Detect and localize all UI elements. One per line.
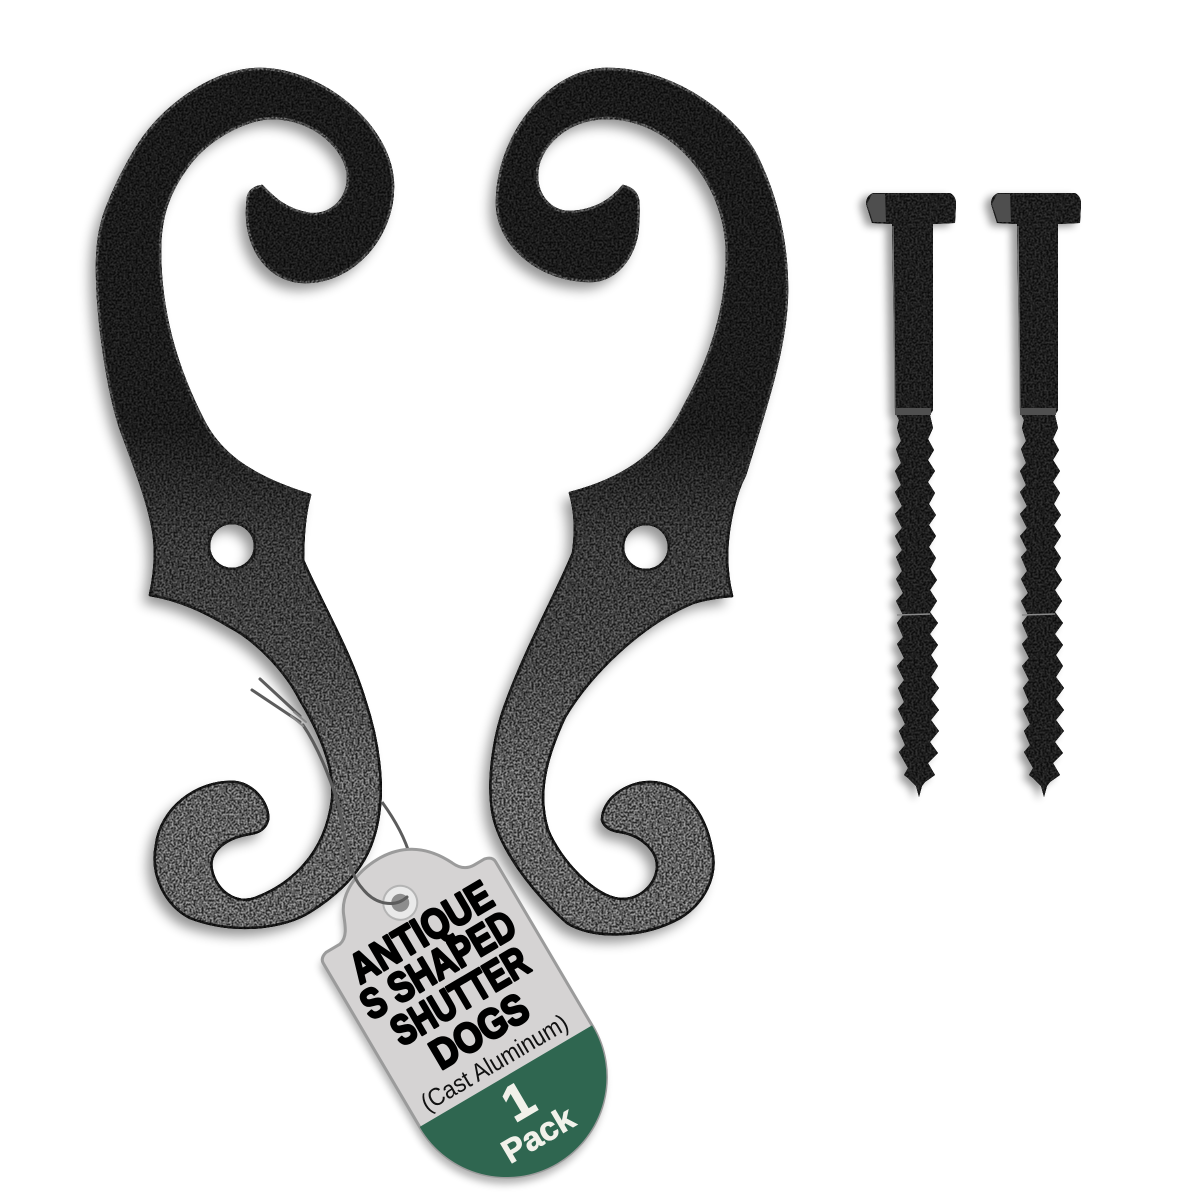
tag title: DOGS: [422, 984, 537, 1078]
lag screw: right: [985, 193, 1081, 800]
shutter dog: right: [483, 69, 787, 942]
tag green footer: [420, 1025, 643, 1200]
shutter dog: left: [90, 69, 393, 936]
tag title: ANTIQUE: [341, 872, 501, 992]
pack count: 1: [492, 1070, 545, 1133]
wire: tag tie in front: [252, 679, 407, 903]
wire: tag tie behind tag: [382, 802, 410, 856]
pack label: Pack: [495, 1098, 581, 1170]
lag screw: left: [860, 193, 956, 800]
tag title: SHUTTER: [382, 937, 537, 1055]
tag subtitle: (Cast Aluminum): [416, 1009, 573, 1117]
tag title: [333, 869, 564, 1096]
tag title: S SHAPED: [352, 901, 524, 1029]
grommet: [377, 880, 424, 926]
tag: [288, 808, 646, 1200]
